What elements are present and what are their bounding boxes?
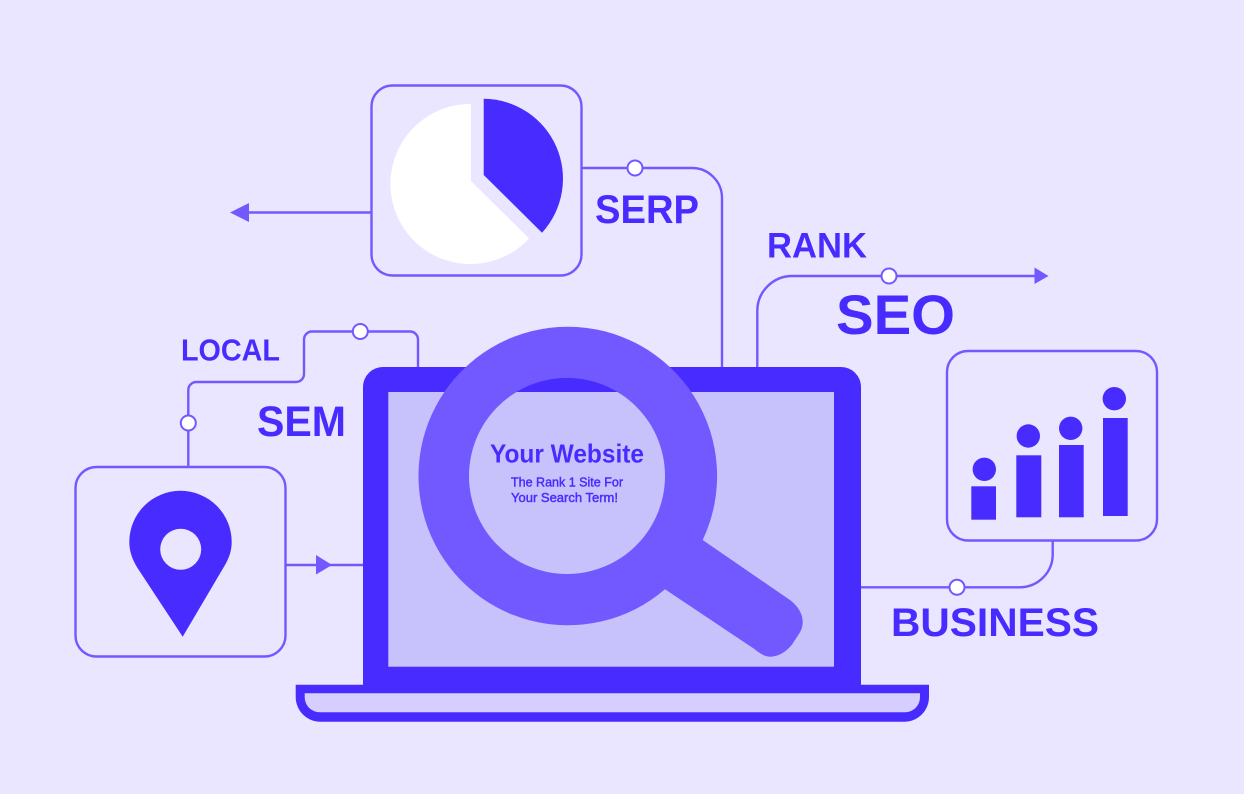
connector: laptop to rank arrow with node <box>757 268 1048 367</box>
label: SEO: SEO <box>836 283 955 346</box>
heading: Your Website: Your Website <box>490 438 644 468</box>
icon: magnifying glass <box>418 327 803 657</box>
laptop screen <box>388 392 834 667</box>
arrow: location card to laptop <box>286 555 363 574</box>
label: BUSINESS: BUSINESS <box>891 601 1099 645</box>
label: LOCAL: LOCAL <box>181 332 280 368</box>
connector: chart card to laptop with node <box>861 541 1053 595</box>
laptop frame seen through lens <box>516 378 618 392</box>
label: SEM: SEM <box>257 398 346 446</box>
laptop frame <box>363 367 861 690</box>
blue pie slice <box>484 99 563 233</box>
connector: pie card to laptop with node <box>582 160 722 367</box>
panel: location pin card <box>76 467 286 656</box>
connector: location card to laptop top with nodes <box>181 324 418 467</box>
panel: pie chart card <box>372 86 582 276</box>
subtext line 1: The Rank 1 Site For <box>511 474 624 490</box>
bar chart <box>971 387 1128 520</box>
panel: bar chart card <box>947 351 1157 540</box>
laptop <box>296 367 929 722</box>
laptop base inset <box>305 693 920 712</box>
label: RANK: RANK <box>767 226 867 266</box>
text block: lens copy <box>490 438 644 505</box>
subtext line 2: Your Search Term! <box>511 490 618 505</box>
laptop base <box>296 685 929 722</box>
icon: location pin <box>129 491 232 637</box>
arrow: pie card pointing left <box>230 203 371 222</box>
white pie slice <box>390 104 529 264</box>
label: SERP: SERP <box>595 188 699 232</box>
